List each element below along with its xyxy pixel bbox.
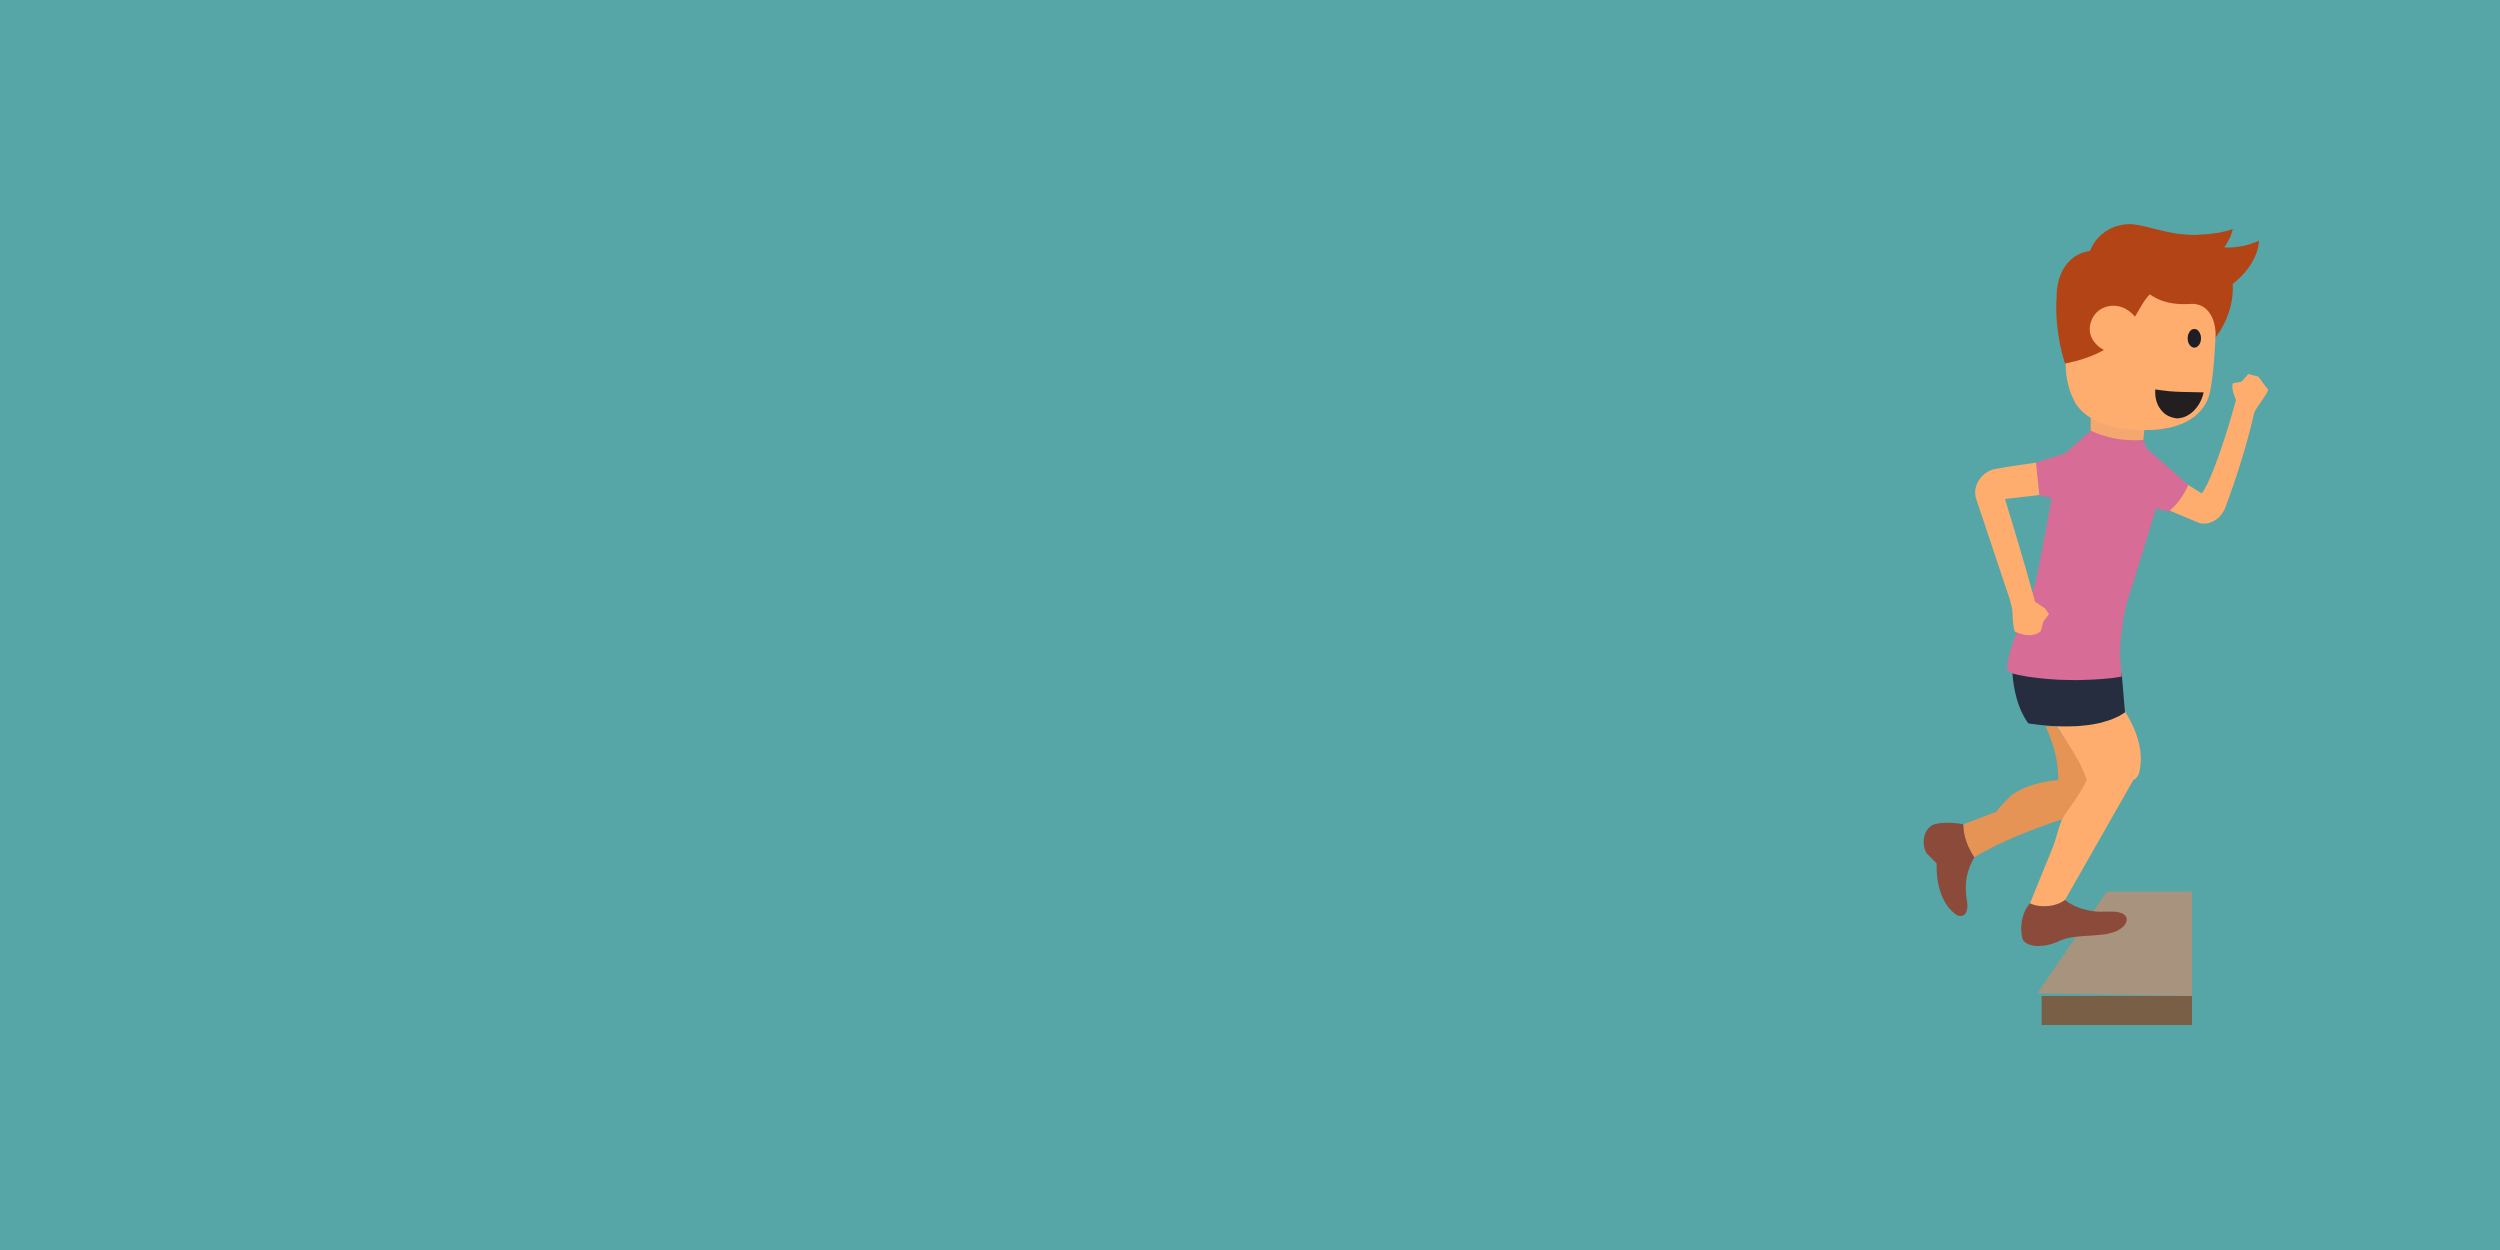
- neck: [2091, 413, 2145, 440]
- shorts: [2012, 672, 2125, 726]
- front shoe: [2021, 900, 2127, 946]
- eye: [2188, 329, 2201, 348]
- back arm: [1975, 463, 2049, 635]
- mouth: [2155, 389, 2204, 418]
- front leg: [2030, 712, 2141, 906]
- back leg: [1963, 726, 2093, 857]
- front arm: [2168, 374, 2268, 524]
- figure: runner and step: [1924, 224, 2268, 1025]
- step top: [2037, 892, 2192, 996]
- hair: [2056, 224, 2259, 367]
- t-shirt: [2007, 431, 2188, 680]
- step front: [2042, 996, 2192, 1025]
- head: [2066, 294, 2216, 430]
- back shoe: [1924, 823, 1974, 916]
- step: [2037, 892, 2192, 1025]
